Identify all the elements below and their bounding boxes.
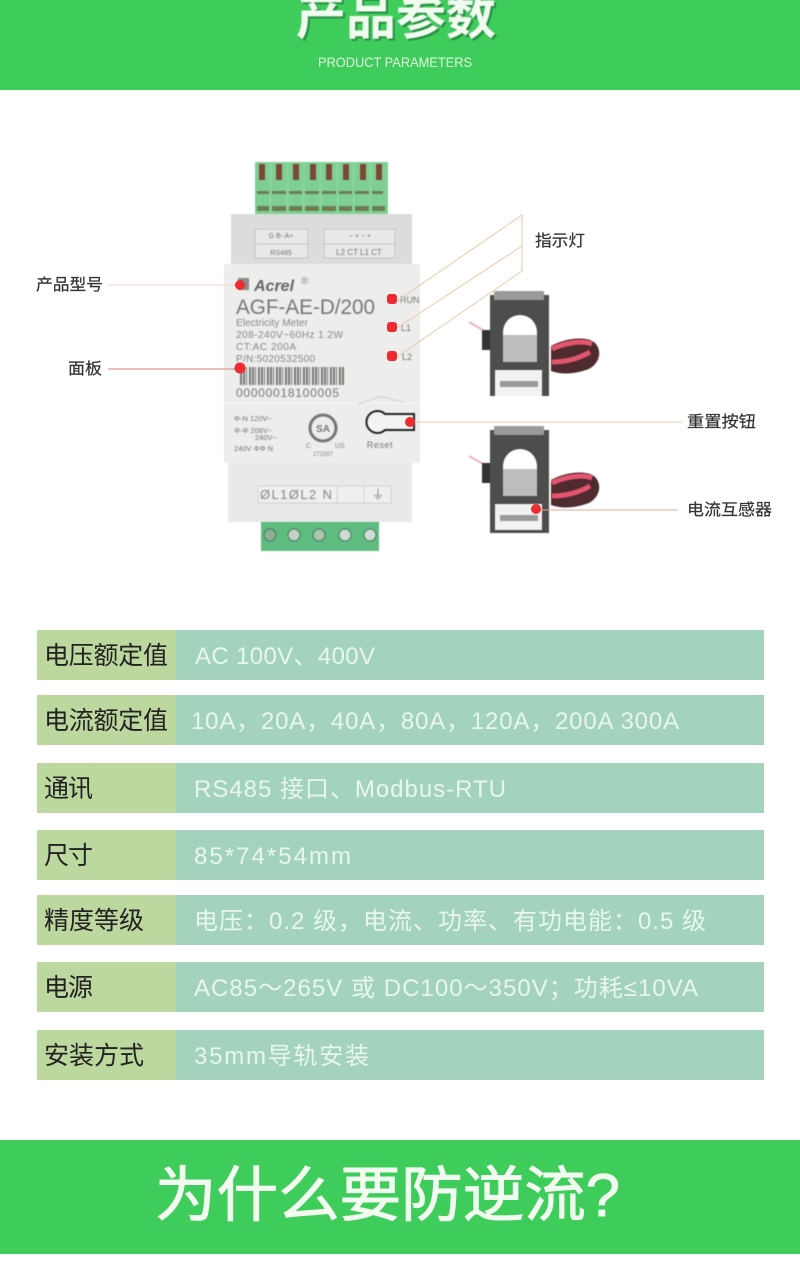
- row: rated current: 电流额定值: [44, 707, 168, 735]
- specification text: 208-240V~60Hz 1.2W: [236, 330, 344, 341]
- reset button: [358, 397, 414, 450]
- brand: ®: [301, 276, 309, 287]
- certification mark: SA: [316, 424, 330, 435]
- voltage text: Φ-N 120V~: [234, 414, 272, 423]
- barcode: [240, 367, 344, 385]
- lower housing: [228, 462, 412, 522]
- voltage text: 240V~: [255, 433, 278, 442]
- certification mark: C: [306, 443, 311, 450]
- callout labels: 指示灯: [535, 232, 585, 250]
- row: communication: [37, 763, 764, 813]
- voltage text: [234, 414, 278, 453]
- current transformer bottom: [469, 426, 599, 533]
- header banner: [0, 0, 800, 90]
- current transformer top: [469, 291, 599, 396]
- bottom green terminal: [261, 522, 379, 551]
- specification text: Electricity Meter: [236, 318, 309, 329]
- upper housing: RS485: [270, 250, 292, 257]
- lower housing: ØL1ØL2 N: [260, 487, 332, 502]
- row: size: 尺寸: [44, 842, 93, 870]
- upper housing: L2 CT L1 CT: [336, 248, 382, 257]
- row: size: 85*74*54mm: [194, 843, 351, 870]
- subheading: PRODUCT PARAMETERS: [318, 54, 472, 70]
- callout labels: 电流互感器: [687, 501, 772, 519]
- row: installation: 安装方式: [44, 1042, 144, 1070]
- row: rated voltage: [37, 630, 764, 680]
- row: installation: 35mm导轨安装: [194, 1043, 369, 1070]
- row: accuracy: [37, 895, 764, 945]
- callout labels: [36, 232, 772, 519]
- row: power supply: 电源: [44, 974, 93, 1002]
- voltage text: 240V ΦΦ N: [234, 444, 273, 453]
- certification mark: 271597: [313, 452, 334, 458]
- upper housing: [231, 214, 412, 266]
- row: rated voltage: AC 100V、400V: [195, 643, 375, 670]
- parameter table: [37, 630, 764, 1080]
- specification text: CT:AC 200A: [236, 342, 296, 353]
- row: accuracy: 精度等级: [44, 907, 144, 935]
- LED labels: [400, 295, 420, 362]
- LED labels: RUN: [400, 295, 420, 305]
- banner heading: 为什么要防逆流?: [155, 1162, 620, 1229]
- row: communication: 通讯: [44, 775, 93, 803]
- row: size: [37, 830, 764, 880]
- row: installation: [37, 1030, 764, 1080]
- row: accuracy: 电压：0.2 级，电流、功率、有功电能：0.5 级: [194, 908, 706, 935]
- top green terminal: [255, 162, 388, 214]
- brand: [238, 276, 309, 295]
- voltage text: Φ-Φ 208V~: [234, 426, 273, 435]
- certification mark: US: [335, 443, 345, 450]
- callout dots: [234, 280, 541, 514]
- upper housing: − + − +: [349, 233, 371, 240]
- serial number: 00000018100005: [236, 386, 339, 400]
- specification text: P/N:5020532500: [236, 354, 315, 365]
- LED labels: L1: [401, 323, 411, 333]
- reset button: Reset: [367, 440, 393, 450]
- model text: AGF-AE-D/200: [236, 296, 375, 319]
- LED labels: L2: [402, 352, 412, 362]
- lower housing: ⏚: [371, 487, 385, 502]
- row: power supply: AC85～265V 或 DC100～350V；功耗≤10VA: [194, 975, 698, 1002]
- callout labels: 产品型号: [36, 276, 103, 294]
- row: rated current: 10A，20A，40A，80A，120A，200A 300A: [191, 708, 679, 735]
- footer banner: [0, 1140, 800, 1254]
- row: power supply: [37, 962, 764, 1012]
- callout labels: 重置按钮: [687, 413, 756, 431]
- upper housing: G B- A+: [269, 233, 293, 240]
- callout lines: [108, 215, 682, 510]
- meter device: [224, 162, 420, 551]
- row: rated current: [37, 695, 764, 745]
- callout labels: 面板: [68, 360, 102, 378]
- certification mark: [306, 415, 345, 458]
- row: communication: RS485 接口、Modbus-RTU: [194, 776, 506, 803]
- brand: Acrel: [253, 278, 295, 295]
- specification text: [236, 318, 344, 365]
- front panel: [224, 264, 420, 463]
- row: rated voltage: 电压额定值: [44, 642, 168, 670]
